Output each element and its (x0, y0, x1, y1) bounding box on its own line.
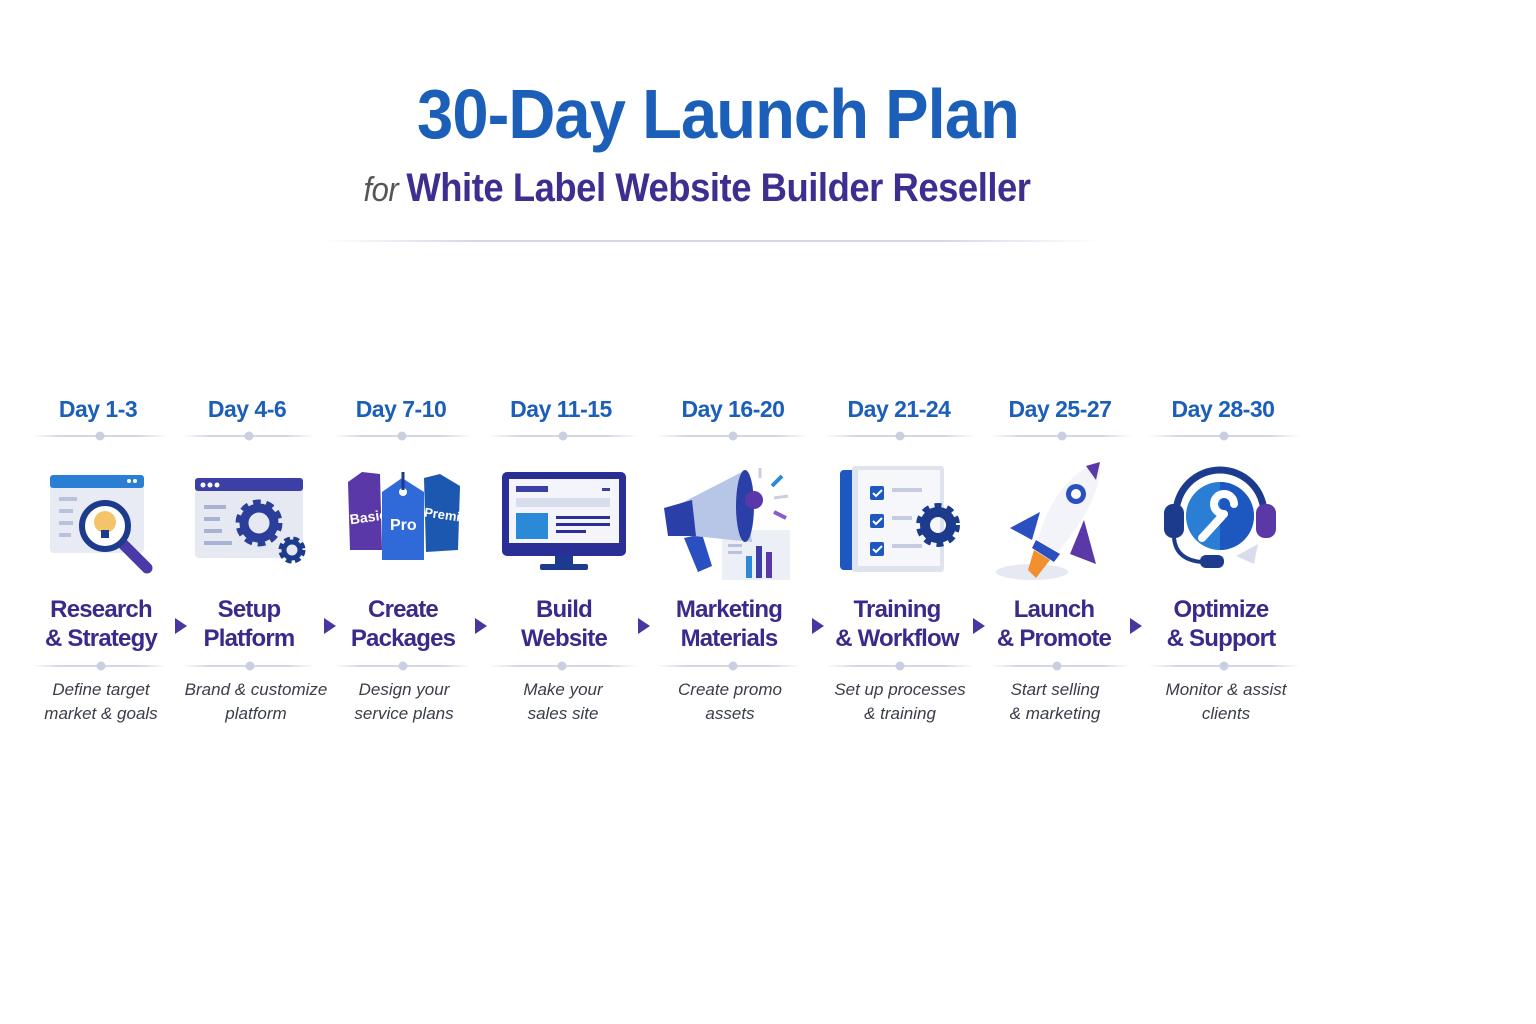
text: Training (854, 596, 940, 623)
text: & training (864, 704, 936, 723)
icon: support headset (1164, 466, 1276, 568)
icon: megaphone (664, 468, 790, 580)
text: Day 1-3 (59, 396, 137, 422)
text: Start selling (1011, 680, 1099, 699)
text: platform (225, 704, 287, 723)
icon: research magnifier (50, 475, 152, 574)
text: sales site (528, 704, 598, 723)
text: Design your (359, 680, 449, 699)
text: Day 16-20 (682, 396, 784, 422)
text: & Promote (997, 625, 1111, 652)
text: Make your (523, 680, 603, 699)
text: clients (1202, 704, 1250, 723)
text: Set up processes (834, 680, 966, 699)
text: Materials (681, 625, 777, 652)
icon: rocket (996, 462, 1100, 580)
text: Day 21-24 (848, 396, 950, 422)
text: & Workflow (835, 625, 959, 652)
text: market & goals (44, 704, 158, 723)
text: assets (705, 704, 755, 723)
text: Day 11-15 (510, 396, 612, 422)
icon: setup platform (195, 478, 306, 564)
text: Monitor & assist (1166, 680, 1286, 699)
text: Create (368, 596, 438, 623)
icon: price tags: Pro (390, 517, 417, 534)
text: Day 7-10 (356, 396, 446, 422)
text: Build (536, 596, 592, 623)
text: & marketing (1010, 704, 1100, 723)
text: service plans (354, 704, 454, 723)
text: Website (521, 625, 607, 652)
text: Launch (1014, 596, 1094, 623)
text: Brand & customize (185, 680, 327, 699)
text: Define target (52, 680, 150, 699)
icon: price tags (348, 472, 470, 560)
text: Packages (351, 625, 455, 652)
title: 30-Day Launch Plan (417, 75, 1019, 153)
step descriptions (44, 680, 1287, 723)
text: Day 25-27 (1009, 396, 1111, 422)
subtitle: for White Label Website Builder Reseller (363, 166, 1031, 210)
text: Marketing (676, 596, 782, 623)
icon: checklist gear (840, 466, 960, 572)
text: Research (50, 596, 152, 623)
arrows (175, 618, 1142, 634)
day labels (59, 396, 1274, 422)
text: Day 28-30 (1172, 396, 1274, 422)
icon: price tags: Basic (349, 506, 388, 527)
text: Optimize (1174, 596, 1268, 623)
text: & Support (1167, 625, 1275, 652)
text: & Strategy (45, 625, 157, 652)
text: Create promo (678, 680, 782, 699)
step titles (45, 596, 1276, 652)
text: Platform (204, 625, 294, 652)
text: Setup (218, 596, 280, 623)
icon: monitor website (502, 472, 626, 570)
text: Day 4-6 (208, 396, 286, 422)
